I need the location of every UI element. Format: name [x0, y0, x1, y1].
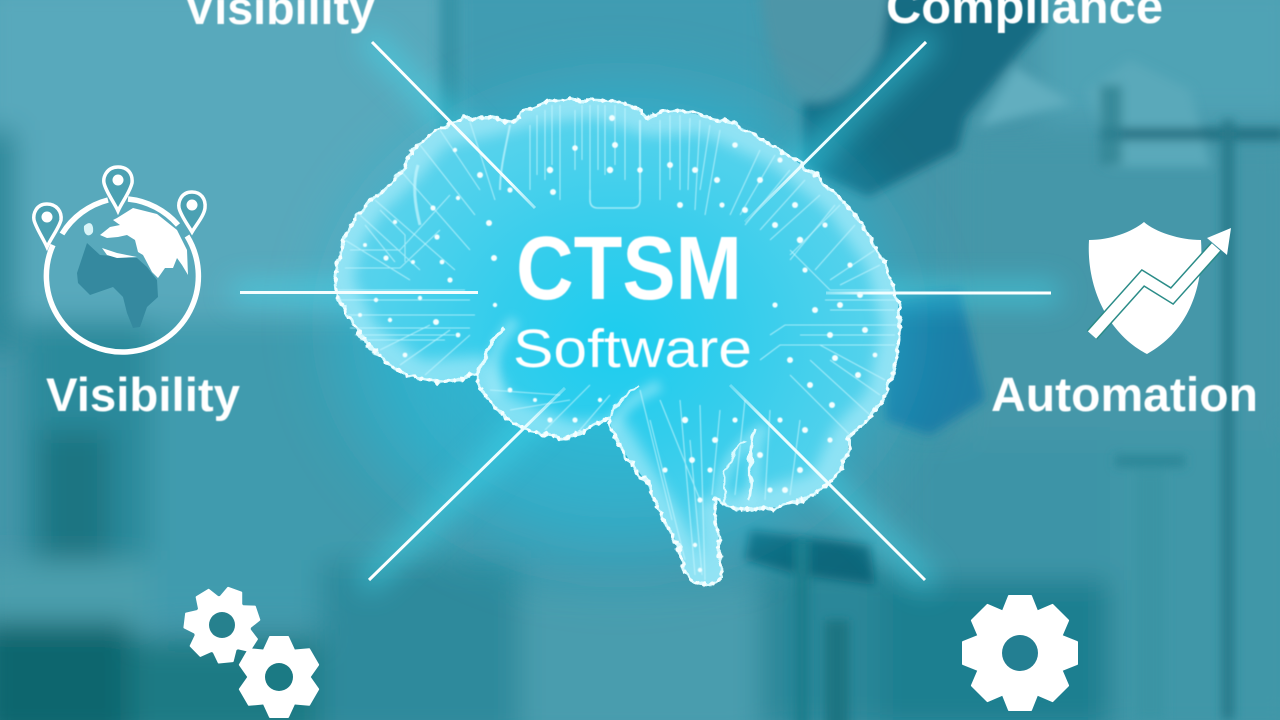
gear: upper	[184, 586, 261, 663]
arrow head	[1207, 228, 1231, 255]
globe ring	[46, 199, 198, 352]
pin: right	[179, 192, 205, 232]
icon: single gear	[963, 596, 1077, 710]
globe land: North Africa coast	[102, 248, 137, 258]
center title: CTSM: CTSM	[516, 219, 742, 319]
connector: right	[826, 292, 1051, 294]
shield	[1089, 222, 1201, 354]
globe land: Africa	[77, 243, 158, 328]
pin: left	[34, 204, 61, 247]
connector: bottom-right	[730, 385, 925, 580]
icon: double gears	[184, 586, 321, 717]
brain fissures and circuit traces	[338, 105, 898, 580]
arrow shaft	[1092, 247, 1216, 335]
icon: shield with growth arrow	[1089, 222, 1231, 354]
connector: top-left	[372, 42, 535, 208]
connector: top-right	[745, 42, 926, 222]
connector: bottom-left	[369, 388, 565, 580]
brain bumpy outline	[335, 100, 900, 585]
brain node dots	[358, 115, 877, 572]
label: Automation: Automation	[991, 369, 1258, 422]
gear: lower	[237, 637, 321, 717]
brain body	[335, 100, 900, 585]
brain inner edge glow	[335, 100, 900, 583]
center subtitle: Software: Software	[513, 319, 752, 379]
icon: globe with location pins	[34, 167, 205, 352]
globe land: Greenland	[84, 223, 93, 235]
connector glow	[240, 42, 1051, 580]
label: Visibility: Visibility	[46, 368, 240, 421]
glow behind brain	[295, 50, 945, 600]
arrow outline	[1092, 247, 1216, 335]
pin: top	[104, 167, 132, 211]
globe land: Europe and Asia	[100, 208, 188, 278]
brain	[335, 100, 900, 585]
connector: left	[240, 291, 478, 294]
